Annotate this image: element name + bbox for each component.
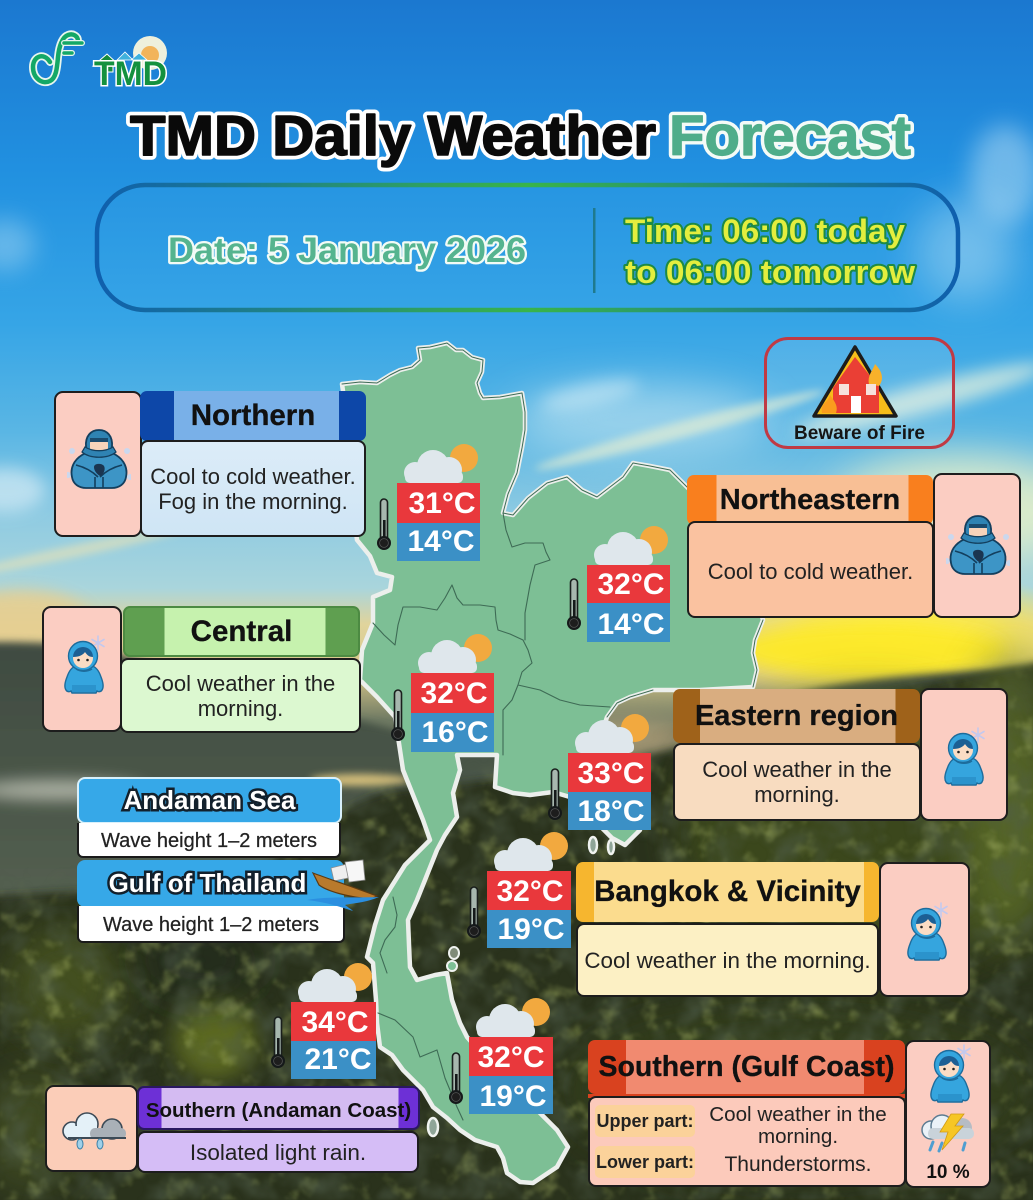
clouds and sun glow xyxy=(0,125,1033,715)
description xyxy=(673,743,921,821)
icons and rain chance xyxy=(905,1040,991,1188)
upper text: morning. xyxy=(758,1125,838,1148)
description: morning. xyxy=(754,782,840,807)
icon: cold person xyxy=(933,473,1021,618)
heading: Eastern region xyxy=(695,700,898,732)
icon: hooded child xyxy=(879,862,970,997)
panel: southern gulf coast xyxy=(588,1040,991,1188)
temperature: bangkok: 19°C xyxy=(497,913,565,946)
heading xyxy=(77,860,344,907)
heading: Northeastern xyxy=(720,484,900,516)
logo xyxy=(33,34,167,93)
temperature: central: 16°C xyxy=(421,716,489,749)
rain chance: 10 % xyxy=(926,1162,970,1183)
description: morning. xyxy=(198,696,283,720)
title xyxy=(130,104,911,168)
temperature: central xyxy=(391,634,494,752)
upper text xyxy=(709,1103,887,1148)
icon: house on fire warning xyxy=(812,345,898,418)
heading xyxy=(137,1086,420,1130)
description: Cool weather in the xyxy=(146,670,335,696)
description: Isolated light rain. xyxy=(190,1140,366,1164)
heading: Northern xyxy=(191,399,315,432)
temperature: southern gulf: 32°C xyxy=(477,1041,545,1074)
icon: boat xyxy=(308,860,379,911)
date and time pill xyxy=(97,185,958,310)
upper label xyxy=(595,1105,695,1137)
heading xyxy=(77,777,342,824)
title: Forecast xyxy=(669,104,911,168)
temperature: northeastern: 32°C xyxy=(597,568,665,601)
heading xyxy=(588,1040,905,1094)
heading: Southern (Andaman Coast) xyxy=(146,1098,411,1122)
description: Fog in the morning. xyxy=(158,488,348,514)
lower label xyxy=(595,1146,695,1178)
description xyxy=(576,923,879,997)
logo: TMD xyxy=(94,55,167,93)
icon: hooded child xyxy=(42,606,122,732)
heading: Southern (Gulf Coast) xyxy=(598,1050,895,1082)
heading xyxy=(673,689,920,743)
callout: beware of fire xyxy=(764,337,955,449)
wave height: Wave height 1–2 meters xyxy=(103,914,319,936)
temperature: northern xyxy=(377,444,480,561)
icon: rain cloud xyxy=(45,1085,138,1172)
panel: andaman sea xyxy=(77,777,342,858)
panel: gulf of thailand xyxy=(77,860,379,943)
lower label: Lower part: xyxy=(596,1152,694,1172)
upper text: Cool weather in the xyxy=(709,1103,887,1126)
temperature: eastern: 18°C xyxy=(577,795,645,828)
icon: thunderstorm xyxy=(921,1114,974,1152)
temperature: southern gulf xyxy=(449,998,553,1114)
map of Thailand xyxy=(342,343,763,1183)
description xyxy=(140,440,366,537)
description: Cool weather in the xyxy=(702,757,892,782)
description xyxy=(687,521,934,618)
distant hills and mist xyxy=(0,642,1033,1200)
time xyxy=(625,213,915,290)
heading: Central xyxy=(191,614,292,648)
label: Beware of Fire xyxy=(794,423,925,444)
panel: southern andaman coast xyxy=(45,1085,420,1173)
temperature: northeastern xyxy=(567,526,670,642)
description: Cool to cold weather. xyxy=(708,559,913,584)
panel: northeastern xyxy=(687,473,1021,618)
temperature: central: 32°C xyxy=(420,677,488,710)
icon: hooded child xyxy=(920,688,1008,821)
temperature: northern: 14°C xyxy=(407,525,475,558)
temperature: southern andaman: 34°C xyxy=(301,1006,369,1039)
temperature: southern andaman: 21°C xyxy=(304,1043,372,1076)
temperature: bangkok: 32°C xyxy=(496,875,564,908)
time: to 06:00 tomorrow xyxy=(625,254,915,290)
heading xyxy=(123,606,360,657)
temperature: northern: 31°C xyxy=(408,487,476,520)
icon: cold person xyxy=(54,391,142,537)
wave height: Wave height 1–2 meters xyxy=(101,830,317,852)
icon: hooded child xyxy=(930,1044,971,1103)
temperature: eastern xyxy=(548,714,651,830)
description xyxy=(137,1131,419,1173)
heading: Bangkok & Vicinity xyxy=(594,875,861,908)
heading xyxy=(576,862,879,922)
wave height xyxy=(77,906,345,943)
heading xyxy=(140,391,366,441)
time: Time: 06:00 today xyxy=(625,213,905,249)
description xyxy=(588,1096,906,1187)
wave height xyxy=(77,823,341,858)
temperature: northeastern: 14°C xyxy=(597,608,665,641)
description: Cool to cold weather. xyxy=(150,464,356,488)
forest texture xyxy=(0,640,1033,1200)
temperature: eastern: 33°C xyxy=(577,757,645,790)
temperature: southern gulf: 19°C xyxy=(479,1080,547,1113)
date: Date: 5 January 2026 xyxy=(168,231,526,270)
upper label: Upper part: xyxy=(596,1111,694,1131)
title: TMD Daily Weather xyxy=(130,104,656,168)
description: Cool weather in the morning. xyxy=(584,948,871,972)
title: Forecast xyxy=(669,104,911,168)
heading: Gulf of Thailand xyxy=(109,868,306,898)
title: TMD Daily Weather xyxy=(130,104,656,168)
panel: central xyxy=(42,606,361,733)
panel: northern xyxy=(54,391,366,537)
lower text: Thunderstorms. xyxy=(724,1153,872,1176)
temperature: bangkok xyxy=(467,832,571,948)
panel: eastern xyxy=(673,688,1008,821)
description xyxy=(120,658,361,733)
panel: bangkok and vicinity xyxy=(576,862,970,997)
heading: Andaman Sea xyxy=(124,785,295,815)
temperature: southern andaman xyxy=(271,963,376,1079)
heading xyxy=(687,475,933,525)
